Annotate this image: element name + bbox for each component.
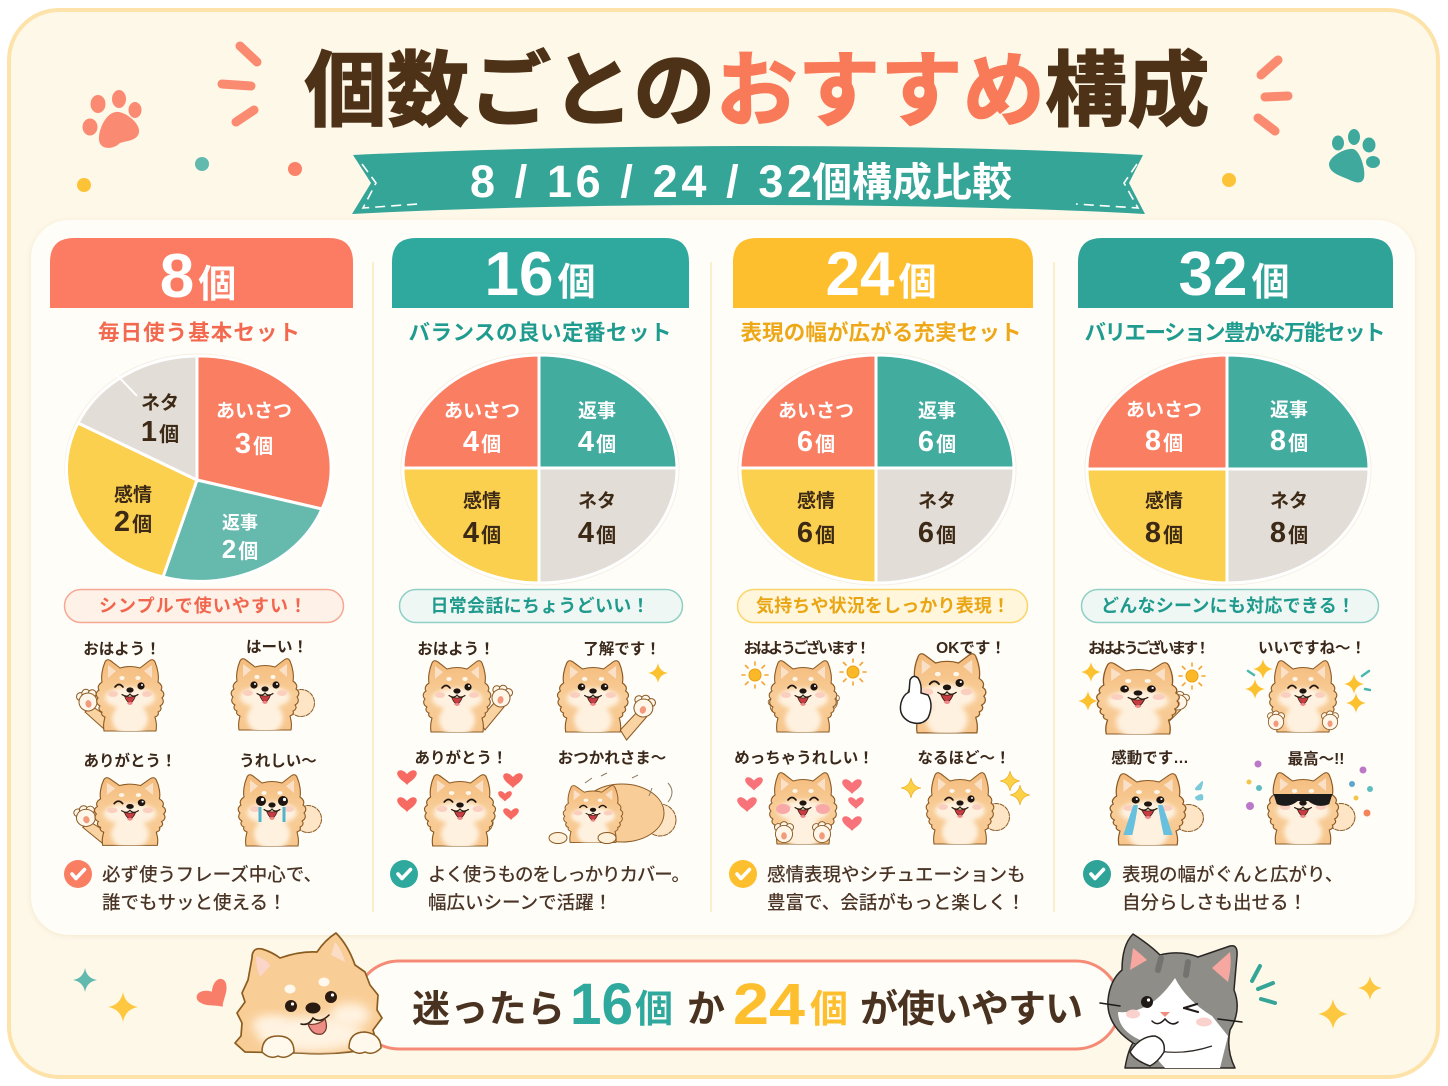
check note: 自分らしさも出せる！ <box>1122 892 1307 913</box>
sticker: いいですね <box>1245 639 1370 736</box>
conclusion pill <box>355 961 1120 1049</box>
conclusion text: 16 <box>570 972 633 1037</box>
panel: 16個 <box>390 238 690 913</box>
sticker: OKです <box>900 639 1006 737</box>
check note: 幅広いシーンで活躍！ <box>428 892 612 913</box>
pill: 日常会話にちょうどいい！ <box>430 596 650 616</box>
pie chart 16個: あいさつ <box>444 400 520 422</box>
sticker: ありがとう: ありがとう！ <box>414 748 508 767</box>
icon: heart <box>195 977 236 1016</box>
conclusion text: が使いやすい <box>860 989 1083 1031</box>
pie chart 16個: 返事 <box>578 400 616 422</box>
dividers <box>373 262 1054 912</box>
pill: 気持ちや状況をしっかり表現！ <box>756 595 1010 616</box>
decoration: left burst lines <box>222 46 257 122</box>
panel: 8個 <box>50 238 353 913</box>
check note <box>64 860 322 913</box>
ribbon text: 8 / 16 / 24 / 32 <box>470 156 812 207</box>
decoration: cat accent lines <box>1252 966 1275 1003</box>
pie chart 32個: ネタ <box>1270 490 1308 512</box>
conclusion text: 迷ったら <box>412 989 565 1031</box>
pie chart 8個 <box>65 354 331 582</box>
sticker: うれしい: うれしい〜 <box>239 752 317 770</box>
check note <box>729 860 1026 913</box>
sticker: 最高: 最高〜!! <box>1288 750 1344 768</box>
sticker: 感動です: 感動です… <box>1111 748 1189 767</box>
check note <box>390 860 690 913</box>
sticker: いいですね: いいですね〜！ <box>1258 639 1366 657</box>
pie chart 32個: 8個 <box>1145 425 1183 457</box>
pie chart 8個: 返事 <box>222 513 258 533</box>
subtitle: 毎日使う基本セット <box>98 321 300 345</box>
pie chart 32個: あいさつ <box>1126 399 1202 421</box>
pie chart 24個: 6個 <box>797 426 835 458</box>
icon: teal paw <box>1329 129 1380 182</box>
decoration: bottom sparkles <box>73 968 1382 1029</box>
pie chart 24個: 6個 <box>918 517 956 549</box>
sticker: おはようございます: おはようございます！ <box>1088 639 1210 657</box>
check note <box>1083 860 1343 913</box>
sticker: おはようございます <box>742 639 870 736</box>
subtitle: バリエーション豊かな万能セット <box>1084 321 1386 345</box>
pill <box>400 590 682 622</box>
sticker: 了解です <box>557 640 668 740</box>
check note: よく使うものをしっかりカバー。 <box>428 864 690 885</box>
conclusion text: 個 <box>635 989 673 1031</box>
header: 8個 <box>50 238 353 311</box>
sticker: ありがとう: ありがとう！ <box>83 751 177 770</box>
pie chart 24個: 6個 <box>797 517 835 549</box>
header: 16個 <box>392 238 689 309</box>
subtitle: バランスの良い定番セット <box>408 321 672 345</box>
pie chart 32個: 8個 <box>1145 517 1183 549</box>
sticker: おはよう <box>417 640 514 736</box>
pie chart 8個: 2個 <box>114 506 152 538</box>
sticker: めっちゃうれしい <box>734 749 874 848</box>
pill: シンプルで使いやすい！ <box>99 596 307 616</box>
check note: 誰でもサッと使える！ <box>102 892 286 913</box>
conclusion text: 個 <box>810 989 848 1031</box>
sticker: おはようございます <box>1078 639 1210 738</box>
sticker: ありがとう <box>72 751 177 849</box>
panel: 24個 <box>729 238 1033 913</box>
subtitle: 表現の幅が広がる充実セット <box>740 320 1022 345</box>
panel: 32個 <box>1078 238 1393 913</box>
character: shiba dog <box>235 933 382 1057</box>
sticker: ありがとう <box>397 748 523 850</box>
pie chart 8個: 感情 <box>114 483 152 506</box>
pie chart 24個: 感情 <box>797 489 835 512</box>
sticker: めっちゃうれしい: めっちゃうれしい！ <box>734 749 874 767</box>
pie chart 32個: 8個 <box>1270 425 1308 457</box>
pie chart 16個: 4個 <box>463 426 501 458</box>
check note: 豊富で、会話がもっと楽しく！ <box>767 892 1025 913</box>
header: 32個: 32個 <box>1179 240 1289 309</box>
sticker: おはよう: おはよう！ <box>83 640 161 658</box>
pie chart 16個: 4個 <box>463 517 501 549</box>
ribbon banner <box>352 146 1145 214</box>
sticker: なるほど: なるほど〜！ <box>917 749 1011 767</box>
pie chart 24個: ネタ <box>918 490 956 512</box>
pie chart 16個: ネタ <box>578 490 616 512</box>
sticker: おはよう: おはよう！ <box>417 640 495 658</box>
sticker: 感動です <box>1110 748 1203 849</box>
white content panel <box>31 220 1415 935</box>
header: 24個 <box>733 238 1033 309</box>
decoration: right burst lines <box>1258 60 1288 131</box>
pie chart 32個: 感情 <box>1145 489 1183 512</box>
ribbon text <box>470 156 1012 207</box>
pie chart 24個: あいさつ <box>778 400 854 422</box>
sticker: おはよう <box>75 640 164 735</box>
sticker: おつかれさま <box>549 749 676 846</box>
pie chart 32個 <box>1085 353 1371 585</box>
check note: 必ず使うフレーズ中心で、 <box>102 864 322 885</box>
sticker: おつかれさま: おつかれさま〜 <box>558 749 666 767</box>
pie chart 16個 <box>401 353 679 585</box>
sticker: はーい <box>231 639 314 734</box>
pie chart 8個: あいさつ <box>216 400 292 422</box>
check note: 表現の幅がぐんと広がり、 <box>1122 864 1343 885</box>
sticker: なるほど <box>901 749 1030 848</box>
icon: coral paw <box>82 90 142 148</box>
pie chart 24個 <box>738 353 1016 585</box>
sticker: 了解です: 了解です！ <box>583 640 661 658</box>
pill <box>1082 590 1378 622</box>
pill <box>64 590 344 622</box>
pill: どんなシーンにも対応できる！ <box>1101 596 1355 616</box>
check note: 感情表現やシチュエーションも <box>767 864 1026 885</box>
header: 16個: 16個 <box>485 240 595 309</box>
decoration: confetti dots <box>77 157 1236 192</box>
sticker: OKです: OKです！ <box>936 639 1006 657</box>
conclusion text: 24 <box>733 972 805 1037</box>
header: 32個 <box>1078 238 1393 309</box>
pie chart 8個: 1個 <box>141 416 179 448</box>
pie chart 24個: 6個 <box>918 426 956 458</box>
sticker: はーい: はーい！ <box>246 639 308 656</box>
ribbon text: 個構成比較 <box>812 161 1012 205</box>
pie chart 24個: 返事 <box>918 400 956 422</box>
sticker: うれしい <box>238 752 322 850</box>
header: 24個: 24個 <box>826 240 936 309</box>
pie chart 32個: 8個 <box>1270 517 1308 549</box>
pie chart 8個: 2個 <box>222 534 258 564</box>
sticker: 最高 <box>1246 750 1373 848</box>
pie chart 8個: 3個 <box>235 428 273 460</box>
title: 個数ごとのおすすめ構成 <box>304 46 1210 137</box>
conclusion text <box>412 972 1083 1037</box>
header: 8個: 8個 <box>160 242 236 311</box>
character: cat <box>1100 934 1242 1068</box>
pie chart 8個: ネタ <box>141 392 179 414</box>
pie chart 16個: 感情 <box>463 489 501 512</box>
sticker: おはようございます: おはようございます！ <box>744 639 870 657</box>
pie chart 32個: 返事 <box>1270 399 1308 421</box>
pie chart 16個: 4個 <box>578 426 616 458</box>
conclusion text: か <box>687 989 725 1031</box>
pill <box>738 590 1028 622</box>
pie chart 16個: 4個 <box>578 517 616 549</box>
